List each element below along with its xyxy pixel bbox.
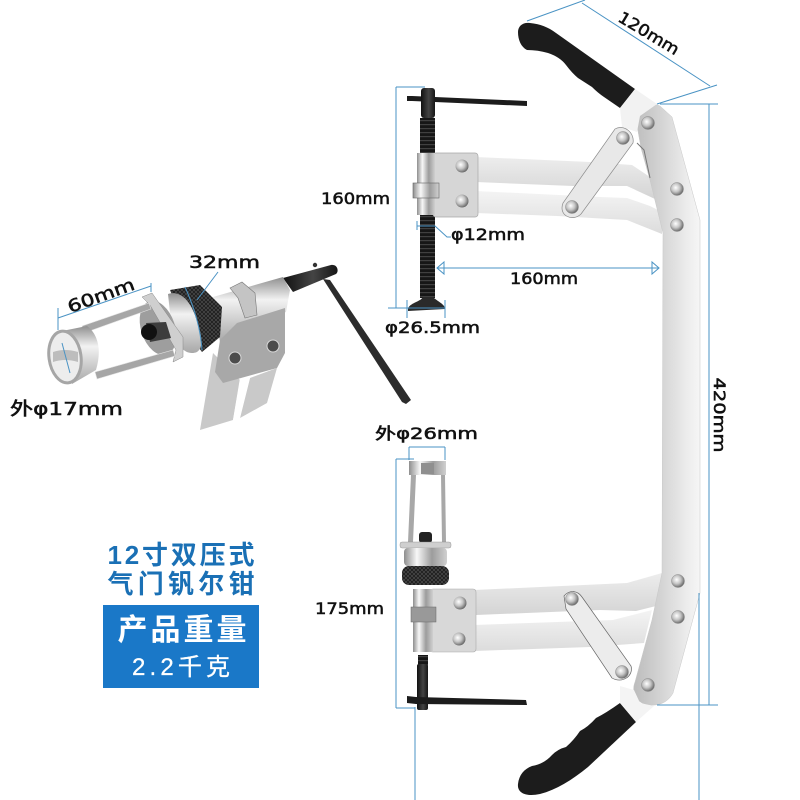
detail view: adapter tool <box>46 263 411 430</box>
upper arm, top strip <box>476 157 655 199</box>
front ring body <box>62 326 99 384</box>
product title: 12寸双压式 <box>108 540 254 570</box>
lower black handle <box>518 703 636 795</box>
black end shaft <box>283 265 338 292</box>
clamp plate <box>433 153 478 217</box>
plate <box>430 589 476 652</box>
adapter rods <box>408 475 446 542</box>
foot pad <box>408 297 445 311</box>
hex nut <box>413 183 439 198</box>
weight panel: 产品重量 <box>118 614 246 647</box>
upper handle root <box>620 89 657 132</box>
rods <box>82 303 175 379</box>
upper hinge shadow <box>637 143 650 178</box>
lower handle root <box>620 686 654 722</box>
lower arm, top strip <box>474 573 662 615</box>
weight panel: 2.2千克 <box>132 654 230 681</box>
upper black handle <box>518 23 635 108</box>
body cylinder <box>213 277 290 342</box>
adapter cap <box>409 461 446 475</box>
ring inner shade <box>53 350 78 362</box>
plate screws <box>229 352 241 364</box>
label: 160mm arm height: 160mm <box>321 189 390 208</box>
L-shaped rod <box>323 279 411 404</box>
back disk <box>133 296 183 360</box>
threaded stub <box>418 655 428 665</box>
label: phi 26.5mm: φ26.5mm <box>385 318 480 337</box>
upper arm, bottom strip <box>476 191 662 234</box>
upper clamp screw assembly <box>407 88 527 311</box>
label: 32mm: 32mm <box>189 253 260 273</box>
label: 420mm: 420mm <box>710 378 729 452</box>
label: outer phi 26mm: 外φ26mm <box>375 424 478 443</box>
main vertical bar with bends <box>634 105 700 705</box>
cylinder <box>417 153 435 215</box>
threaded tip <box>146 322 171 342</box>
knurled nut <box>402 566 449 585</box>
T bar <box>407 696 527 705</box>
product title: 气门钒尔钳 <box>108 569 254 599</box>
label: phi 12mm: φ12mm <box>451 225 525 244</box>
hex nut <box>411 607 436 622</box>
T bar <box>407 96 527 106</box>
lower arm, bottom strip <box>474 610 652 651</box>
rivets <box>566 116 684 692</box>
front ring opening <box>46 329 84 385</box>
weight panel <box>103 605 259 688</box>
screw head <box>421 88 435 118</box>
label: 60mm: 60mm <box>65 275 138 318</box>
hex nut <box>230 282 257 318</box>
upper link plate <box>562 127 633 218</box>
knurled ring <box>170 285 222 352</box>
bolt <box>419 532 432 543</box>
plate <box>215 308 285 383</box>
product title <box>108 540 254 599</box>
label: 175mm: 175mm <box>315 599 384 618</box>
label: outer phi 17mm: 外φ17mm <box>10 399 123 420</box>
label: 120mm: 120mm <box>615 8 683 59</box>
lower clamp and adapter assembly <box>400 461 527 710</box>
steel legs <box>200 353 277 430</box>
cylinder <box>413 589 433 652</box>
collar <box>168 293 201 353</box>
collar <box>404 548 447 566</box>
valve spring compressor tool: main frame <box>474 23 700 795</box>
threaded rod <box>420 118 435 298</box>
shaft pin <box>313 263 317 267</box>
lower link plate <box>564 592 631 680</box>
label: 160mm reach: 160mm <box>510 269 578 288</box>
flange <box>142 293 183 362</box>
flange <box>400 542 451 548</box>
